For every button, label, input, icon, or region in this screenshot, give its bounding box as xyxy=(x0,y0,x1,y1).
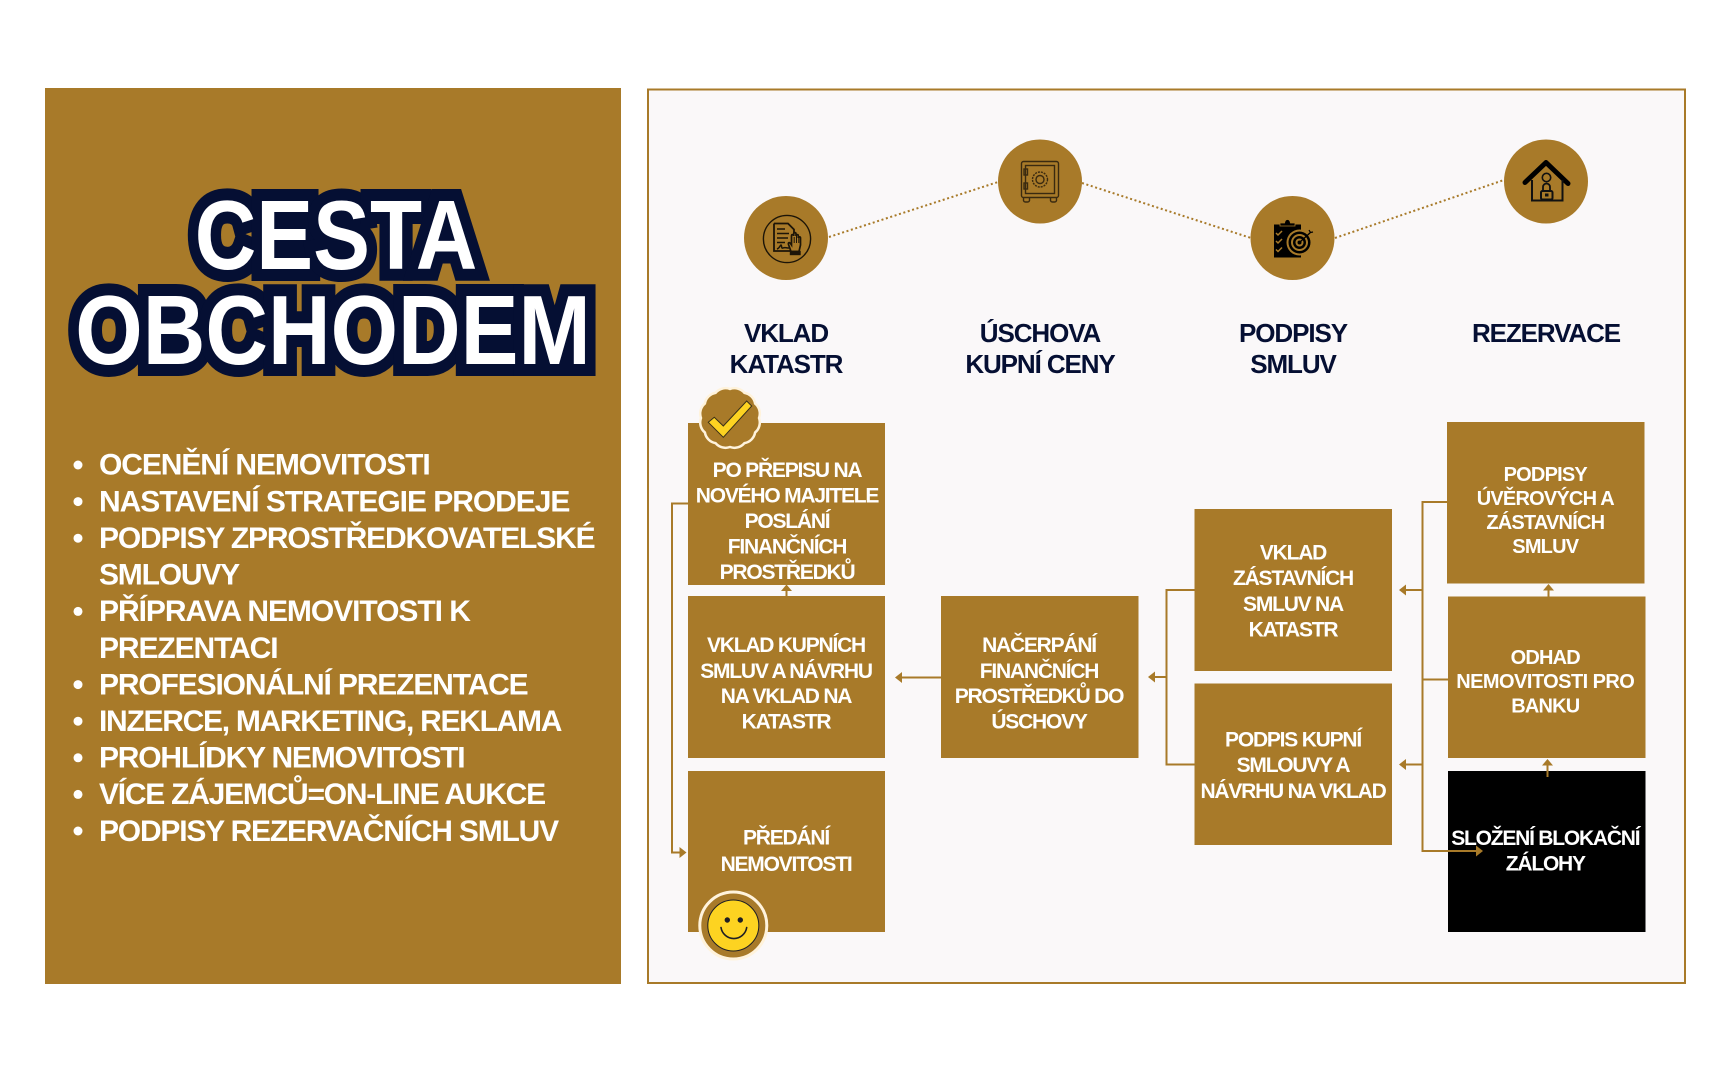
bullet list: steps of the sale: PROFESIONÁLNÍ PREZENTACE xyxy=(99,667,528,701)
box: po přepisu: POSLÁNÍ xyxy=(745,510,832,533)
box: vklad zástavních smluv: SMLUV NA xyxy=(1243,593,1344,616)
box: podpisy úvěrových smluv xyxy=(1447,422,1644,584)
bullet list: steps of the sale: PŘÍPRAVA NEMOVITOSTI K xyxy=(99,594,471,628)
bullet list: steps of the sale: PODPISY REZERVAČNÍCH SMLUV xyxy=(99,814,559,848)
box: podpisy úvěrových smluv: ÚVĚROVÝCH A xyxy=(1477,486,1614,510)
icon: safe xyxy=(998,140,1082,224)
box: odhad nemovitosti xyxy=(1448,596,1646,758)
box: složení blokační zálohy xyxy=(1448,771,1646,932)
box: předání nemovitosti xyxy=(688,771,885,932)
bullet list: steps of the sale: NASTAVENÍ STRATEGIE PRODEJE xyxy=(99,484,569,518)
box: vklad zástavních smluv: ZÁSTAVNÍCH xyxy=(1233,567,1353,590)
box: podpisy úvěrových smluv: PODPISY xyxy=(1504,464,1588,486)
heading: úschova kupní ceny: KUPNÍ CENY xyxy=(965,349,1115,379)
box: načerpání prostředků: ÚSCHOVY xyxy=(991,710,1088,734)
timeline: dotted connector lines xyxy=(829,180,1504,238)
box: po přepisu: FINANČNÍCH xyxy=(728,534,846,558)
heading: úschova kupní ceny: ÚSCHOVA xyxy=(980,318,1102,348)
heading: rezervace: REZERVACE xyxy=(1472,318,1621,348)
heading: podpisy smluv: PODPISY xyxy=(1239,318,1348,348)
panel: process diagram xyxy=(648,90,1685,983)
box: podpisy úvěrových smluv: ZÁSTAVNÍCH xyxy=(1486,511,1605,534)
heading: podpisy smluv xyxy=(1239,318,1348,379)
panel: left summary xyxy=(45,88,621,984)
heading: vklad katastr: VKLAD xyxy=(744,318,828,348)
bullet list: steps of the sale: SMLOUVY xyxy=(99,559,240,592)
box: načerpání prostředků: NAČERPÁNÍ xyxy=(982,633,1098,657)
box: odhad nemovitosti: BANKU xyxy=(1511,696,1580,718)
box: vklad zástavních smluv xyxy=(1194,509,1392,671)
box: vklad kupních smluv: KATASTR xyxy=(742,710,831,734)
box: podpis kupní smlouvy: PODPIS KUPNÍ xyxy=(1225,728,1363,752)
box: odhad nemovitosti: NEMOVITOSTI PRO xyxy=(1456,671,1634,693)
box: vklad kupních smluv: VKLAD KUPNÍCH xyxy=(707,634,865,657)
bullet list: steps of the sale: PODPISY ZPROSTŘEDKOVATELSKÉ xyxy=(99,521,595,555)
box: podpis kupní smlouvy xyxy=(1194,684,1392,845)
icon: house with lock xyxy=(1504,140,1588,224)
box: složení blokační zálohy: ZÁLOHY xyxy=(1506,852,1586,876)
box: podpis kupní smlouvy: SMLOUVY A xyxy=(1237,754,1350,777)
box: odhad nemovitosti: ODHAD xyxy=(1511,647,1580,669)
box: vklad kupních smluv xyxy=(688,596,885,758)
bullet list: steps of the sale: OCENĚNÍ NEMOVITOSTI xyxy=(99,448,430,482)
box: vklad zástavních smluv: VKLAD xyxy=(1260,542,1327,564)
box: po přepisu: PROSTŘEDKŮ xyxy=(720,558,854,584)
icon: clipboard with target xyxy=(1250,196,1334,280)
box: vklad kupních smluv: NA VKLAD NA xyxy=(721,685,852,708)
arrow: contracts bracket to escrow xyxy=(1148,590,1194,764)
bullet list: steps of the sale: VÍCE ZÁJEMCŮ=ON-LINE AUKCE xyxy=(99,775,545,811)
icon: document with hand xyxy=(744,196,828,280)
arrow: escrow to deposit xyxy=(895,672,941,683)
box: předání nemovitosti: PŘEDÁNÍ xyxy=(743,826,831,850)
icon: check badge xyxy=(700,388,760,448)
box: podpis kupní smlouvy: NÁVRHU NA VKLAD xyxy=(1200,780,1387,803)
arrow: valuation to loan signing xyxy=(1543,584,1554,597)
heading: podpisy smluv: SMLUV xyxy=(1250,349,1338,379)
box: předání nemovitosti: NEMOVITOSTI xyxy=(721,853,852,876)
arrow: reservation bracket to contracts xyxy=(1399,502,1483,856)
heading: vklad katastr xyxy=(730,318,844,379)
box: načerpání prostředků xyxy=(941,596,1138,758)
box: po přepisu: NOVÉHO MAJITELE xyxy=(696,484,879,508)
arrow: handover bracket from transfer to handover xyxy=(672,504,688,858)
title xyxy=(75,182,591,385)
box: vklad zástavních smluv: KATASTR xyxy=(1249,618,1338,642)
icon: smiley badge xyxy=(700,892,767,959)
box: vklad kupních smluv: SMLUV A NÁVRHU xyxy=(700,660,872,683)
bullet list: steps of the sale xyxy=(74,448,595,848)
title: CESTA xyxy=(195,182,477,290)
arrow: deposit to transfer xyxy=(781,584,792,597)
bullet list: steps of the sale: INZERCE, MARKETING, REKLAMA xyxy=(99,705,562,738)
arrow: deposit to valuation xyxy=(1542,759,1553,777)
bullet list: steps of the sale: PREZENTACI xyxy=(99,632,277,665)
bullet list: steps of the sale: PROHLÍDKY NEMOVITOSTI xyxy=(99,741,464,775)
box: po přepisu: PO PŘEPISU NA xyxy=(713,458,862,482)
box: načerpání prostředků: PROSTŘEDKŮ DO xyxy=(955,682,1124,708)
heading: úschova kupní ceny xyxy=(965,318,1115,379)
heading: vklad katastr: KATASTR xyxy=(730,349,844,379)
arrow: blocking deposit pointer xyxy=(1448,846,1483,856)
box: složení blokační zálohy: SLOŽENÍ BLOKAČNÍ xyxy=(1451,826,1642,850)
box: podpisy úvěrových smluv: SMLUV xyxy=(1512,536,1580,558)
title: OBCHODEM xyxy=(75,275,591,385)
box: načerpání prostředků: FINANČNÍCH xyxy=(980,659,1098,683)
box: po přepisu xyxy=(688,423,885,585)
